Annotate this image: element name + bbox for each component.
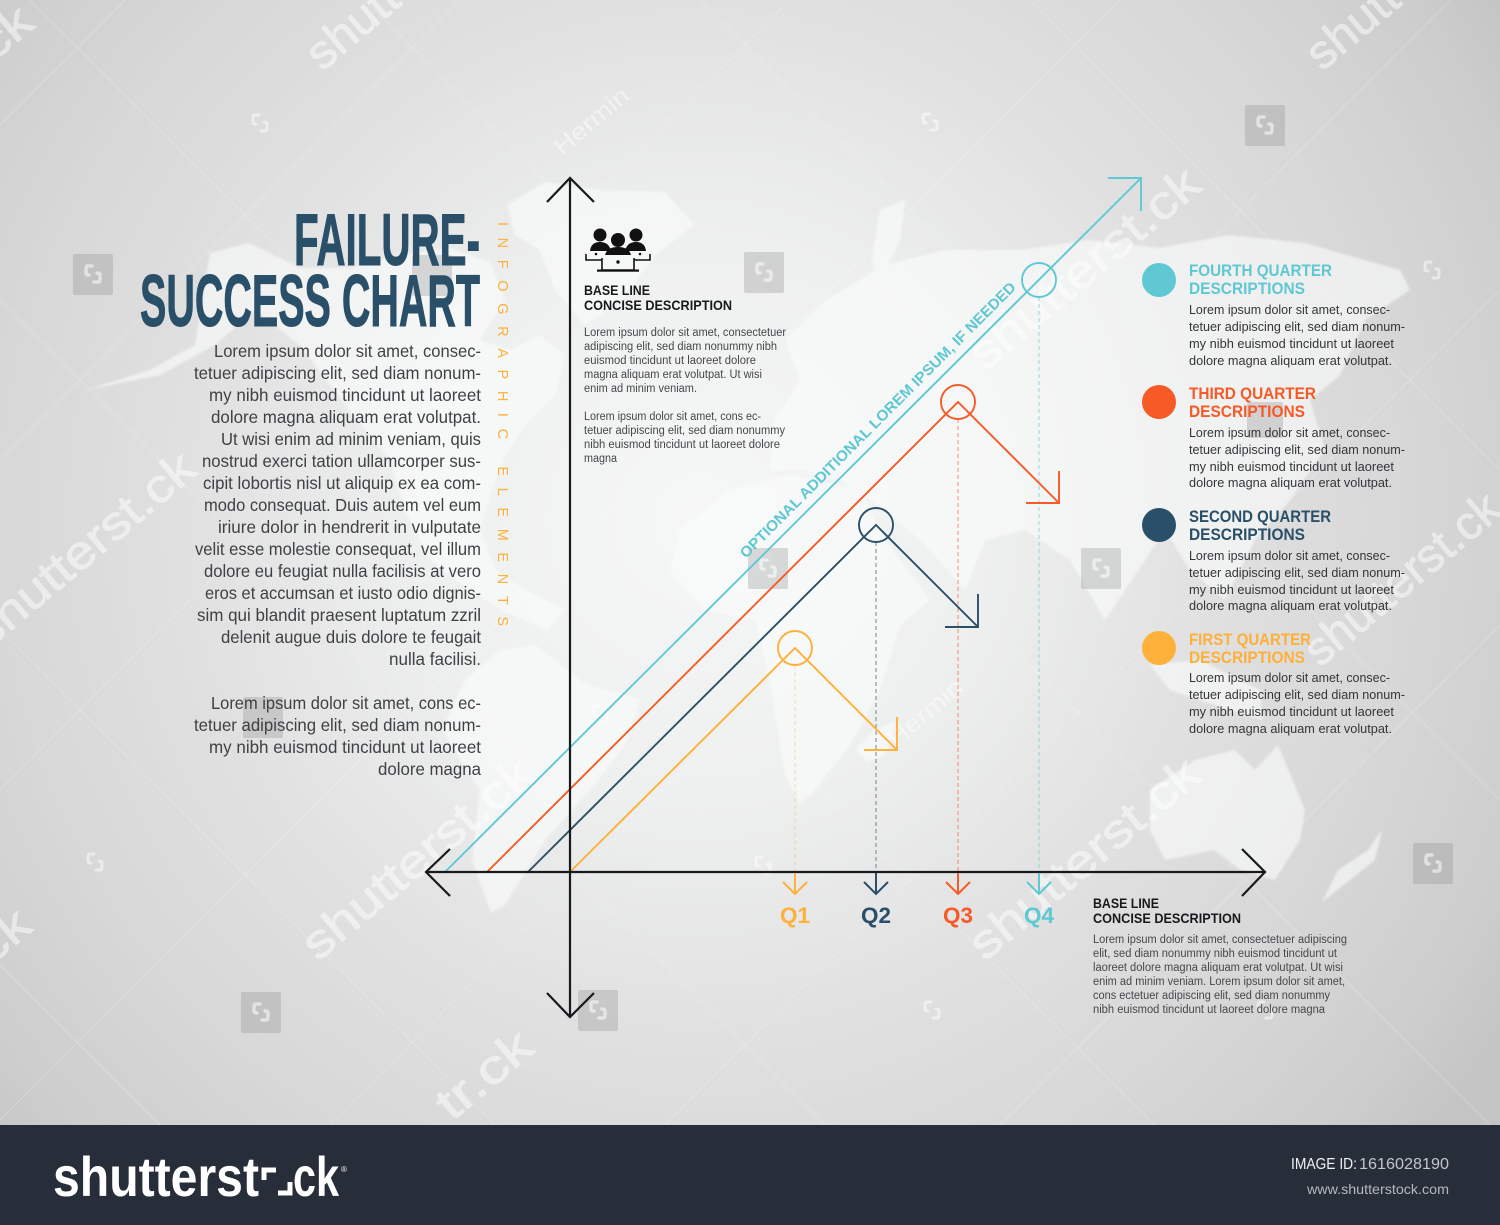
legend: second quarter: dolore magna aliquam erat volutpat. <box>1189 598 1392 613</box>
text: top base line description: Lorem ipsum dolor sit amet, consectetuer <box>584 327 786 339</box>
text: bottom base line description: nibh euismod tincidunt ut laoreet dolore magna <box>1093 1004 1326 1016</box>
legend: fourth quarter <box>1142 262 1405 368</box>
left body text: my nibh euismod tincidunt ut laoreet <box>209 385 481 405</box>
diagonal label: OPTIONAL ADDITIONAL LOREM IPSUM, IF NEEDED <box>737 279 1020 562</box>
text: bottom base line description: Lorem ipsum dolor sit amet, consectetuer adipiscing <box>1093 934 1347 946</box>
watermark: shutterstock: Hermin <box>549 82 635 161</box>
watermark: shutterstock: tr.ck <box>424 1018 543 1130</box>
legend: first quarter: DESCRIPTIONS <box>1189 649 1305 667</box>
text: bottom base line description: cons ectetuer adipiscing elit, sed diam nonummy <box>1093 990 1330 1002</box>
legend: second quarter: tetuer adipiscing elit, sed diam nonum- <box>1189 565 1405 580</box>
legend: third quarter <box>1142 385 1405 490</box>
legend: fourth quarter: dolore magna aliquam erat volutpat. <box>1189 353 1392 368</box>
footer image id: IMAGE ID: <box>1291 1156 1357 1173</box>
quarter labels: Q3 <box>943 903 973 928</box>
title: FAILURE- <box>294 200 480 281</box>
legend: second quarter: Lorem ipsum dolor sit amet, consec- <box>1189 548 1390 563</box>
left body text: eros et accumsan et iusto odio dignis- <box>205 583 481 603</box>
chart: dashed guides <box>795 297 1039 872</box>
text: top base line description: adipiscing elit, sed diam nonummy nibh <box>584 341 777 353</box>
text: top base line description: CONCISE DESCRIPTION <box>584 297 732 313</box>
legend: first quarter: my nibh euismod tincidunt ut laoreet <box>1189 704 1394 719</box>
text: top base line description <box>584 282 786 465</box>
chart: fourth quarter line <box>445 178 1141 872</box>
watermark: shutterstock: Hermin <box>883 674 969 753</box>
text: top base line description: tetuer adipiscing elit, sed diam nonummy <box>584 425 785 437</box>
title <box>140 200 480 342</box>
quarter labels: Q4 <box>1024 903 1055 928</box>
text: bottom base line description: enim ad minim veniam. Lorem ipsum dolor sit amet, <box>1093 976 1345 988</box>
legend: third quarter: THIRD QUARTER <box>1189 385 1316 403</box>
text: top base line description: magna aliquam erat volutpat. Ut wisi <box>584 369 762 381</box>
y axis arrow <box>547 178 594 1017</box>
watermark: shutterstock: shutterst.ck <box>290 745 543 970</box>
left body text: dolore magna aliquam erat volutpat. <box>211 407 481 427</box>
icon: team at laptops <box>586 228 650 272</box>
footer logo: ® <box>341 1165 347 1174</box>
legend: third quarter: my nibh euismod tincidunt ut laoreet <box>1189 459 1394 474</box>
legend: second quarter: DESCRIPTIONS <box>1189 526 1305 544</box>
left body text: dolore eu feugiat nulla facilisis at vero <box>204 561 481 581</box>
left body text: iriure dolor in hendrerit in vulputate <box>218 517 481 537</box>
legend: second quarter <box>1142 508 1405 613</box>
vertical label: INFOGRAPHIC ELEMENTS <box>494 222 510 626</box>
text: bottom base line description: BASE LINE <box>1093 895 1159 911</box>
left body text: modo consequat. Duis autem vel eum <box>204 495 481 515</box>
footer url: www.shutterstock.com <box>1306 1181 1449 1197</box>
left body text: Ut wisi enim ad minim veniam, quis <box>221 429 481 449</box>
legend: first quarter: tetuer adipiscing elit, sed diam nonum- <box>1189 687 1405 702</box>
legend: fourth quarter: Lorem ipsum dolor sit amet, consec- <box>1189 302 1390 317</box>
left body text: nulla facilisi. <box>389 649 481 669</box>
legend: first quarter: FIRST QUARTER <box>1189 631 1311 649</box>
legend: fourth quarter: my nibh euismod tincidunt ut laoreet <box>1189 336 1394 351</box>
footer bar <box>0 1125 1500 1225</box>
text: top base line description: euismod tincidunt ut laoreet dolore <box>584 355 756 367</box>
quarter labels <box>780 903 1055 928</box>
legend: fourth quarter: DESCRIPTIONS <box>1189 280 1305 298</box>
legend: first quarter: Lorem ipsum dolor sit amet, consec- <box>1189 670 1390 685</box>
legend: first quarter: dolore magna aliquam erat volutpat. <box>1189 721 1392 736</box>
x axis arrow <box>426 849 1265 896</box>
chart: third quarter line <box>487 385 1059 872</box>
text: bottom base line description: laoreet dolore magna aliquam erat volutpat. Ut wisi <box>1093 962 1343 974</box>
text: bottom base line description: elit, sed diam nonummy nibh euismod tincidunt ut <box>1093 948 1338 960</box>
text: top base line description: BASE LINE <box>584 282 650 298</box>
left body text: nostrud exerci tation ullamcorper sus- <box>202 451 481 471</box>
left body text: Lorem ipsum dolor sit amet, cons ec- <box>211 693 481 713</box>
left body text: velit esse molestie consequat, vel illum <box>195 539 481 559</box>
legend: third quarter: DESCRIPTIONS <box>1189 403 1305 421</box>
text: top base line description: magna <box>584 453 618 465</box>
watermark: shutterstock: shutterst.ck <box>957 745 1210 970</box>
footer logo: ck <box>293 1145 340 1208</box>
legend: third quarter: tetuer adipiscing elit, sed diam nonum- <box>1189 442 1405 457</box>
legend: fourth quarter: FOURTH QUARTER <box>1189 262 1332 280</box>
left body text: tetuer adipiscing elit, sed diam nonum- <box>194 363 481 383</box>
watermark: shutterstock: shutterst.ck <box>957 155 1210 380</box>
legend: second quarter: my nibh euismod tincidunt ut laoreet <box>1189 582 1394 597</box>
quarter arrows <box>783 873 1051 894</box>
left body text: sim qui blandit praesent luptatum zzril <box>197 605 481 625</box>
left body text <box>194 341 481 779</box>
legend: third quarter: dolore magna aliquam erat volutpat. <box>1189 475 1392 490</box>
left body text: Lorem ipsum dolor sit amet, consec- <box>214 341 481 361</box>
left body text: cipit lobortis nisl ut aliquip ex ea com- <box>203 473 481 493</box>
title: SUCCESS CHART <box>140 261 480 342</box>
left body text: my nibh euismod tincidunt ut laoreet <box>209 737 481 757</box>
left body text: delenit augue duis dolore te feugait <box>221 627 481 647</box>
world map <box>86 182 1410 913</box>
quarter labels: Q2 <box>861 903 891 928</box>
legend: fourth quarter: tetuer adipiscing elit, sed diam nonum- <box>1189 319 1405 334</box>
left body text: dolore magna <box>378 759 481 779</box>
text: top base line description: nibh euismod tincidunt ut laoreet dolore <box>584 439 780 451</box>
text: bottom base line description: CONCISE DESCRIPTION <box>1093 910 1241 926</box>
legend: second quarter: SECOND QUARTER <box>1189 508 1331 526</box>
quarter labels: Q1 <box>780 903 810 928</box>
footer image number: 1616028190 <box>1359 1156 1449 1173</box>
text: bottom base line description <box>1093 895 1347 1016</box>
footer logo: shutterst <box>53 1145 259 1208</box>
left body text: tetuer adipiscing elit, sed diam nonum- <box>194 715 481 735</box>
legend: third quarter: Lorem ipsum dolor sit amet, consec- <box>1189 425 1390 440</box>
watermark: stamps <box>73 105 1453 1033</box>
legend: first quarter <box>1142 631 1405 736</box>
chart: second quarter line <box>528 508 978 872</box>
chart: first quarter line <box>570 631 897 872</box>
text: top base line description: Lorem ipsum dolor sit amet, cons ec- <box>584 411 761 423</box>
text: top base line description: enim ad minim veniam. <box>584 383 697 395</box>
